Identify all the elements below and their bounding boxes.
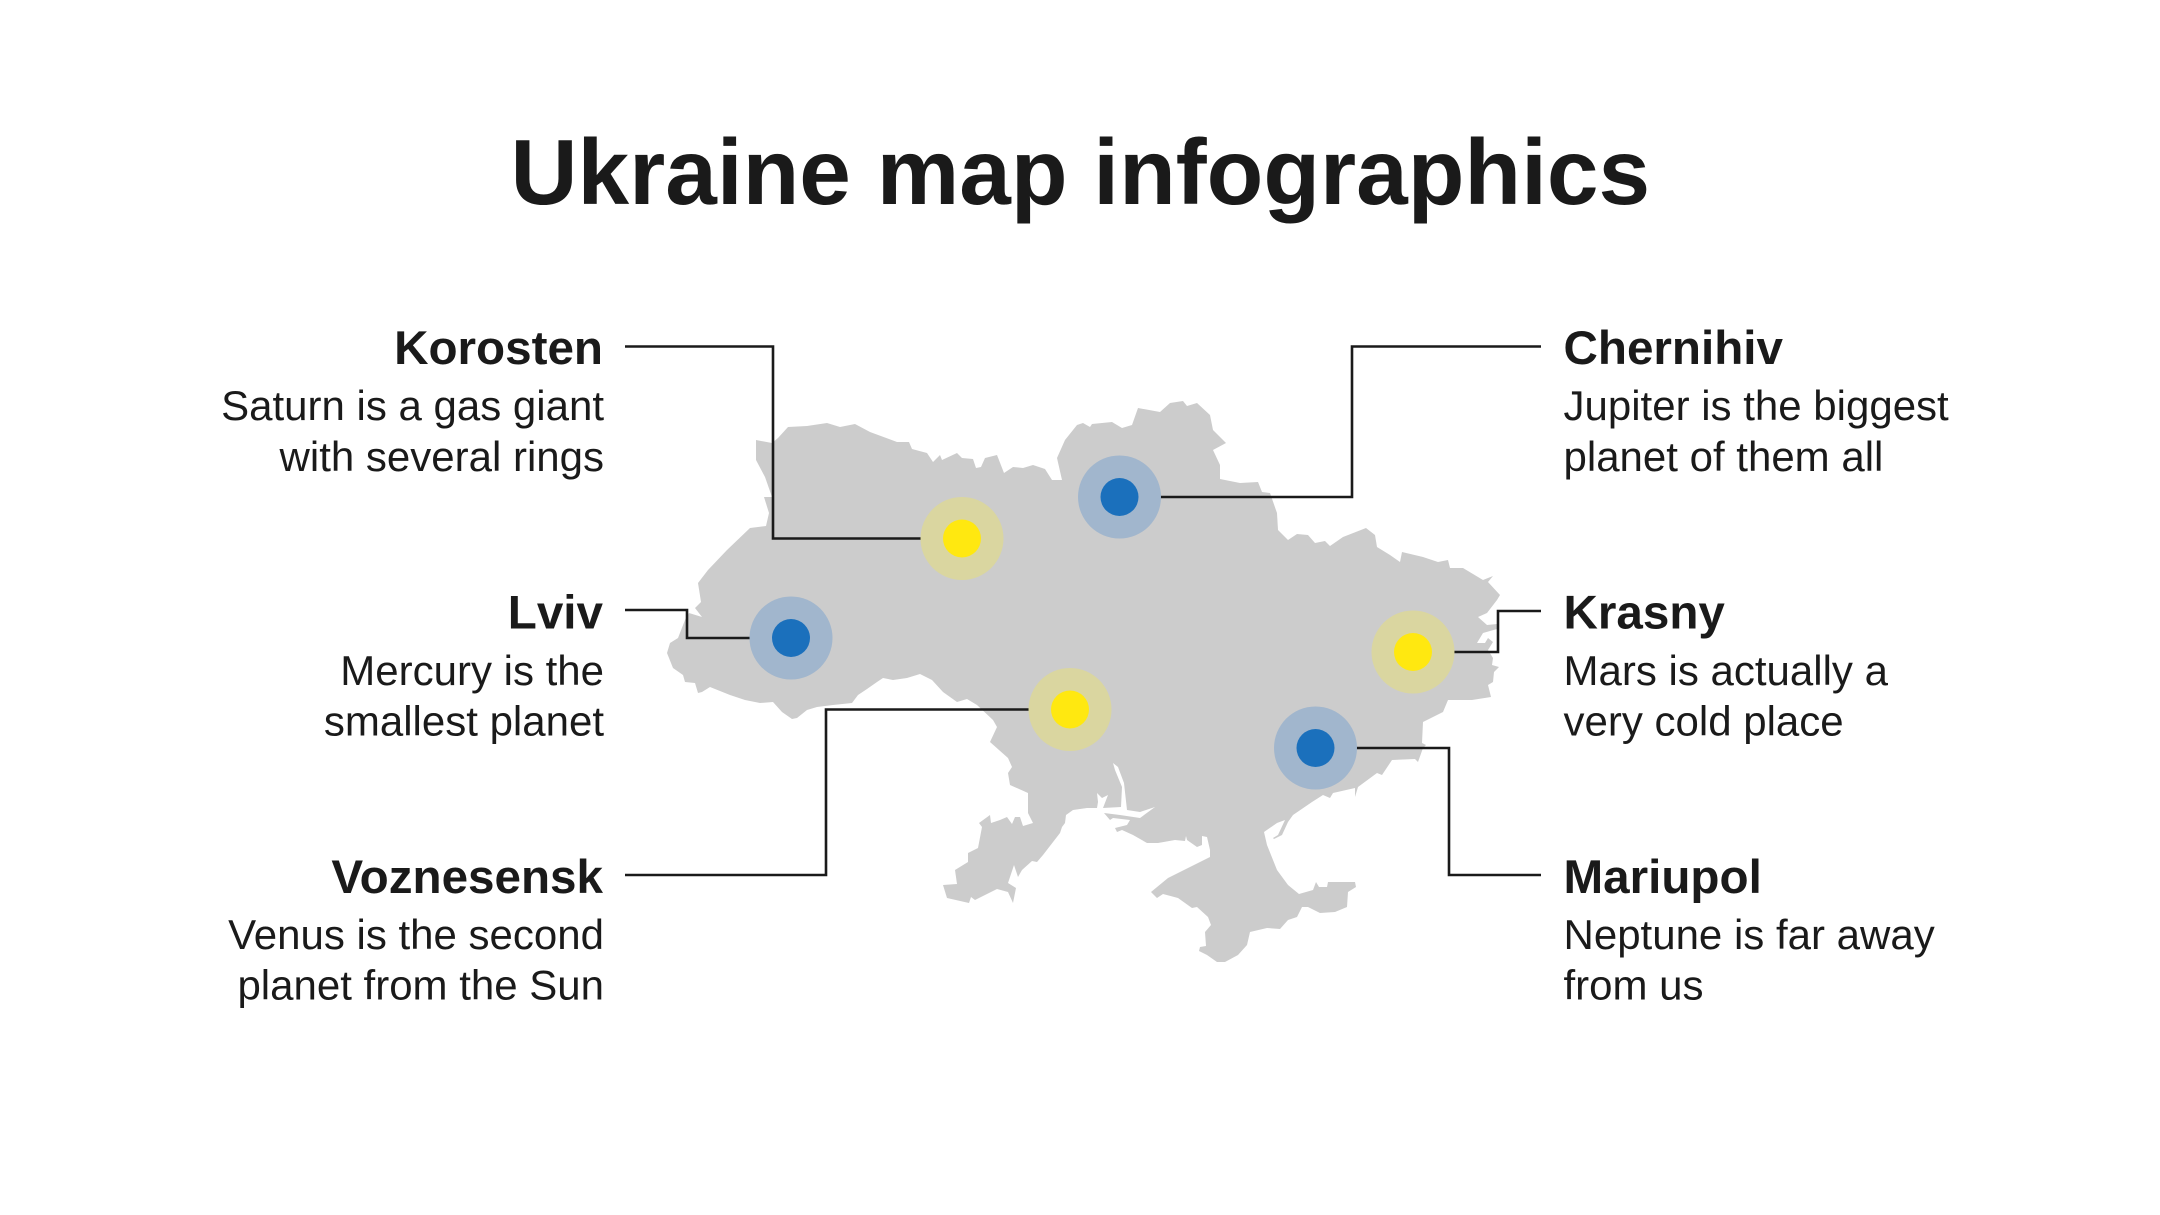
text block: Voznesensk: planet from the Sun xyxy=(237,962,604,1008)
connector: Krasny xyxy=(1454,611,1541,652)
title: Ukraine map infographics xyxy=(510,120,1650,224)
text block: Lviv: Mercury is the xyxy=(340,647,604,694)
marker: Lviv xyxy=(750,596,832,680)
text block: Korosten: with several rings xyxy=(279,433,604,480)
marker: Korosten xyxy=(920,497,1004,580)
text block: Voznesensk: Venus is the second xyxy=(228,911,604,958)
connector: Chernihiv xyxy=(1160,346,1541,497)
text block: Lviv: smallest planet xyxy=(324,698,604,744)
text block: Korosten xyxy=(221,322,604,480)
text block: Chernihiv: planet of them all xyxy=(1564,433,1883,480)
connector: Korosten xyxy=(625,346,922,538)
marker: Krasny xyxy=(1372,610,1454,694)
text block: Lviv: Lviv xyxy=(508,586,604,640)
text block: Chernihiv: Chernihiv xyxy=(1564,322,1784,375)
marker: Voznesensk xyxy=(1028,668,1112,751)
text block: Voznesensk xyxy=(228,851,604,1008)
text block: Korosten: Korosten xyxy=(394,322,603,375)
marker: Mariupol xyxy=(1274,706,1357,790)
map of Ukraine xyxy=(667,401,1500,962)
text block: Chernihiv: Jupiter is the biggest xyxy=(1564,382,1949,429)
connector: Lviv xyxy=(625,610,751,638)
text block: Lviv xyxy=(324,586,604,744)
text block: Korosten: Saturn is a gas giant xyxy=(221,382,604,429)
text block: Mariupol xyxy=(1564,851,1935,1008)
text block: Chernihiv xyxy=(1564,322,1949,480)
text block: Mariupol: from us xyxy=(1564,962,1704,1008)
text block: Krasny: Mars is actually a xyxy=(1564,647,1889,694)
text block: Krasny: very cold place xyxy=(1564,698,1844,744)
text block: Mariupol: Neptune is far away xyxy=(1564,911,1935,958)
marker: Chernihiv xyxy=(1078,456,1161,538)
connector: Voznesensk xyxy=(625,710,1030,875)
text block: Krasny: Krasny xyxy=(1564,586,1725,640)
text block: Mariupol: Mariupol xyxy=(1564,851,1762,904)
text block: Voznesensk: Voznesensk xyxy=(331,851,604,904)
connector: Mariupol xyxy=(1356,748,1541,875)
text block: Krasny xyxy=(1564,586,1889,744)
